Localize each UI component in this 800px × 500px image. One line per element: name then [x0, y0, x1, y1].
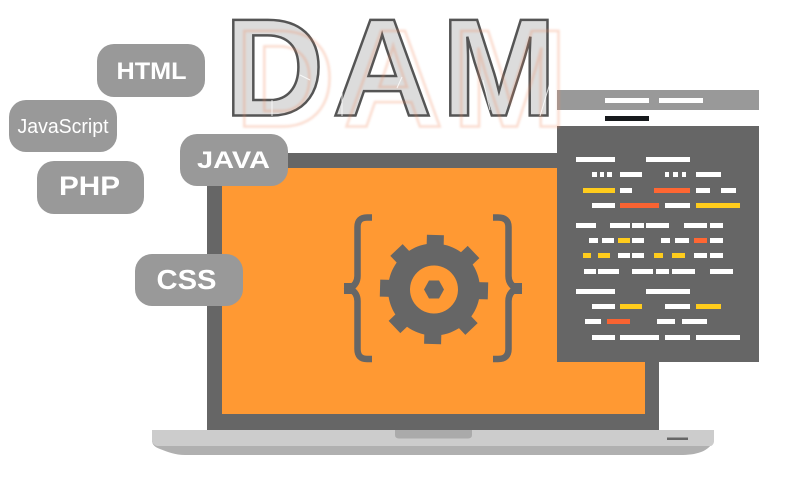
pill: HTML: [97, 44, 205, 97]
pill: PHP: PHP: [59, 171, 120, 201]
pill: JAVA: JAVA: [197, 147, 270, 174]
icon: gear: [379, 234, 489, 345]
title blurred echo: A: [343, 2, 443, 156]
code window: [557, 90, 759, 362]
laptop: [152, 153, 714, 455]
pill: CSS: CSS: [156, 264, 216, 295]
laptop base: [152, 430, 714, 455]
code window tab marker: [605, 116, 649, 121]
pill: JavaScript: JavaScript: [18, 116, 109, 138]
pill: CSS: [135, 254, 243, 306]
code lines: [576, 157, 740, 340]
pill: PHP: [37, 161, 144, 214]
pill: JAVA: [180, 134, 288, 186]
laptop orange display: [222, 168, 645, 414]
pill: JavaScript: [9, 100, 117, 152]
title blurred echo: [235, 2, 568, 156]
title blurred echo: D: [235, 2, 335, 156]
title main letters: [224, 0, 557, 146]
icon: left brace: [344, 218, 372, 359]
laptop screen bezel: [207, 153, 659, 430]
title: DAM: [224, 0, 568, 156]
code window body: [557, 126, 759, 362]
icon: right brace: [493, 218, 522, 359]
icon: gear in braces: [344, 218, 522, 359]
code window title bar: [557, 90, 759, 110]
title blurred echo: M: [452, 2, 568, 156]
language pills: [9, 44, 288, 306]
pill: HTML: HTML: [116, 58, 186, 85]
icon: gear hex bolt: [424, 280, 444, 298]
